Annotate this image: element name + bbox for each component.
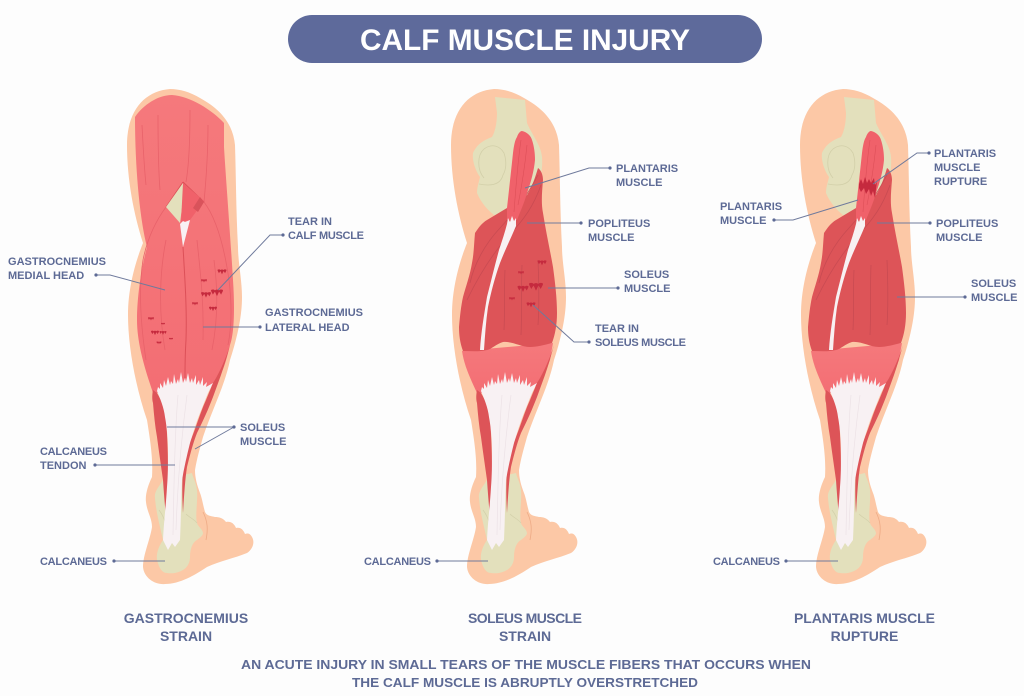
label: popliteus muscle bbox=[877, 218, 998, 244]
label: calcaneus tendon bbox=[40, 446, 175, 472]
label: gastrocnemius lateral head: LATERAL HEAD bbox=[265, 322, 350, 334]
panel: soleus muscle strain bbox=[364, 89, 686, 644]
label: soleus muscle: MUSCLE bbox=[240, 436, 286, 448]
label: calcaneus: CALCANEUS bbox=[364, 556, 431, 568]
caption: soleus muscle strain: STRAIN bbox=[499, 628, 551, 644]
illustration: leg with gastrocnemius muscle bbox=[127, 89, 253, 584]
label: gastrocnemius medial head bbox=[8, 256, 165, 290]
label: soleus muscle bbox=[548, 269, 670, 295]
label: popliteus muscle: POPLITEUS bbox=[588, 218, 650, 230]
label: popliteus muscle bbox=[527, 218, 650, 244]
label: gastrocnemius lateral head bbox=[203, 307, 363, 334]
panel: gastrocnemius strain bbox=[8, 89, 364, 644]
icon: soleus tears bbox=[509, 260, 546, 307]
label: gastrocnemius lateral head: GASTROCNEMIUS bbox=[265, 307, 363, 319]
label: plantaris muscle rupture: MUSCLE bbox=[934, 162, 980, 174]
caption: gastrocnemius strain: STRAIN bbox=[160, 628, 212, 644]
label: soleus muscle: SOLEUS bbox=[240, 422, 285, 434]
label: calcaneus: CALCANEUS bbox=[713, 556, 780, 568]
icon: plantaris rupture bbox=[859, 177, 877, 198]
title banner: CALF MUSCLE INJURY bbox=[360, 24, 690, 57]
label: plantaris muscle: MUSCLE bbox=[720, 215, 766, 227]
label: plantaris muscle: MUSCLE bbox=[616, 177, 662, 189]
label: calcaneus: CALCANEUS bbox=[40, 556, 107, 568]
label: popliteus muscle: POPLITEUS bbox=[936, 218, 998, 230]
label: plantaris muscle rupture: PLANTARIS bbox=[934, 148, 996, 160]
caption: plantaris muscle rupture bbox=[794, 610, 935, 644]
panel: plantaris muscle rupture bbox=[713, 89, 1017, 644]
label: plantaris muscle: PLANTARIS bbox=[720, 201, 782, 213]
label: soleus muscle bbox=[167, 422, 286, 449]
caption: gastrocnemius strain: GASTROCNEMIUS bbox=[124, 610, 248, 626]
label: soleus muscle: SOLEUS bbox=[624, 269, 669, 281]
label: popliteus muscle: MUSCLE bbox=[588, 232, 634, 244]
icon: knee opening between muscle heads bbox=[166, 183, 204, 247]
footer description: AN ACUTE INJURY IN SMALL TEARS OF THE MUSCLE FIBERS THAT OCCURS WHEN bbox=[241, 657, 811, 672]
label: plantaris muscle bbox=[525, 163, 678, 189]
label: plantaris muscle rupture bbox=[873, 148, 996, 188]
label: soleus muscle: SOLEUS bbox=[971, 278, 1016, 290]
footer description bbox=[241, 657, 811, 690]
label: calcaneus tendon: CALCANEUS bbox=[40, 446, 107, 458]
label: calcaneus bbox=[713, 556, 838, 568]
label: plantaris muscle bbox=[720, 200, 858, 227]
label: calcaneus tendon: TENDON bbox=[40, 460, 86, 472]
title banner bbox=[288, 15, 762, 63]
label: plantaris muscle: PLANTARIS bbox=[616, 163, 678, 175]
label: tear in calf muscle: TEAR IN bbox=[288, 216, 332, 228]
label: tear in calf muscle bbox=[218, 216, 364, 290]
label: gastrocnemius medial head: GASTROCNEMIUS bbox=[8, 256, 106, 268]
label: tear in soleus muscle: SOLEUS MUSCLE bbox=[595, 337, 686, 349]
label: popliteus muscle: MUSCLE bbox=[936, 232, 982, 244]
label: soleus muscle: MUSCLE bbox=[971, 292, 1017, 304]
label: tear in soleus muscle bbox=[533, 305, 686, 349]
caption: plantaris muscle rupture: RUPTURE bbox=[831, 628, 898, 644]
caption: soleus muscle strain bbox=[468, 610, 582, 644]
label: tear in calf muscle: CALF MUSCLE bbox=[288, 230, 364, 242]
label: calcaneus bbox=[40, 556, 165, 568]
illustration: leg with plantaris rupture bbox=[800, 89, 926, 584]
footer description: THE CALF MUSCLE IS ABRUPTLY OVERSTRETCHED bbox=[352, 675, 698, 690]
label: plantaris muscle rupture: RUPTURE bbox=[934, 176, 987, 188]
illustration: leg with soleus and plantaris exposed bbox=[451, 89, 577, 584]
caption: soleus muscle strain: SOLEUS MUSCLE bbox=[468, 610, 582, 626]
label: gastrocnemius medial head: MEDIAL HEAD bbox=[8, 270, 84, 282]
label: soleus muscle bbox=[897, 278, 1017, 304]
label: soleus muscle: MUSCLE bbox=[624, 283, 670, 295]
label: tear in soleus muscle: TEAR IN bbox=[595, 323, 639, 335]
caption: gastrocnemius strain bbox=[124, 610, 248, 644]
icon: muscle tears bbox=[148, 269, 226, 344]
label: calcaneus bbox=[364, 556, 488, 568]
caption: plantaris muscle rupture: PLANTARIS MUSCLE bbox=[794, 610, 935, 626]
